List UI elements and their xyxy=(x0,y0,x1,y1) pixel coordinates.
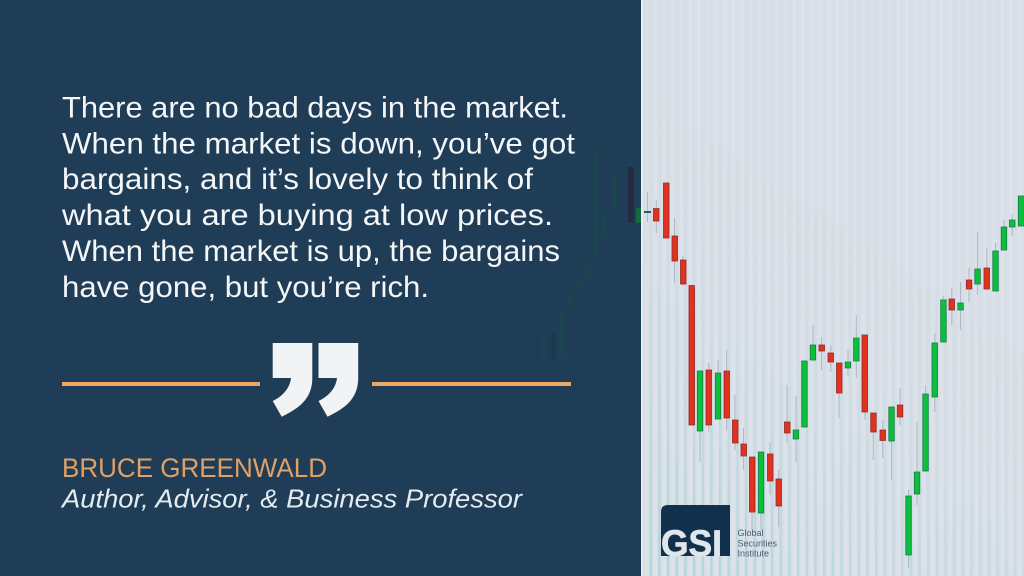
divider with quotation mark xyxy=(62,343,571,417)
attribution: name: BRUCE GREENWALD xyxy=(62,453,327,483)
quote text: There are no bad days in the market. xyxy=(62,92,568,124)
quote text: When the market is down, you’ve got xyxy=(62,128,575,160)
quote text: bargains, and it’s lovely to think of xyxy=(62,163,534,196)
quote text: what you are buying at low prices. xyxy=(61,199,553,232)
attribution: role: Author, Advisor, & Business Professor xyxy=(60,484,523,514)
quote text: have gone, but you’re rich. xyxy=(62,271,429,304)
left navy panel xyxy=(0,0,641,576)
quote text: When the market is up, the bargains xyxy=(62,235,560,268)
logo: Global Securities Institute xyxy=(661,505,778,564)
logo: Global Securities Institute: Institute xyxy=(738,548,769,558)
chart: ghost candles on navy panel xyxy=(541,150,641,366)
logo: Global Securities Institute: Global xyxy=(738,528,764,538)
quote text xyxy=(61,92,575,304)
logo: Global Securities Institute: Securities xyxy=(738,538,778,548)
chart: candlesticks xyxy=(644,183,1024,568)
panel: candlestick chart screen xyxy=(641,0,1024,576)
logo: Global Securities Institute: GSI xyxy=(661,523,722,564)
icon: closing quotation mark xyxy=(273,343,358,417)
